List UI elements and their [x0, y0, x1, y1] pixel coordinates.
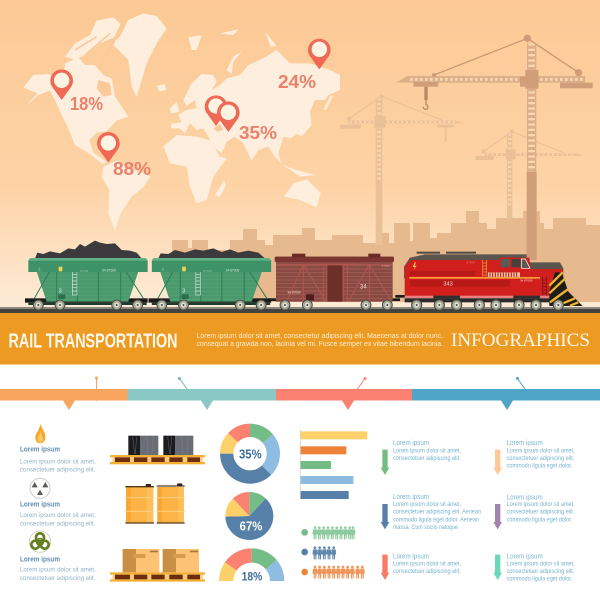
icon: radiation [30, 478, 50, 498]
note 4: commodo ligula eget dolor. [507, 463, 572, 470]
locomotive [395, 252, 583, 311]
label 24%: 24% [278, 71, 316, 92]
box wagon: 34 87009 [287, 291, 301, 295]
arrow: green [381, 450, 389, 475]
text: biohazard: Lorem ipsum [20, 554, 60, 563]
icon: flame [35, 424, 45, 443]
world map [23, 13, 340, 231]
hopper wagon 1 [25, 258, 148, 310]
label 35%: 35% [239, 122, 277, 143]
people row: orange [301, 566, 365, 579]
note 6: Lorem ipsum [507, 551, 543, 560]
note 2: massa. Cum sociis natoque [393, 524, 458, 531]
note 3 [393, 551, 461, 575]
skyline [172, 211, 600, 302]
coal load 1 [35, 241, 142, 258]
map pin: Central Asia [217, 101, 240, 132]
note 2 [393, 492, 481, 531]
note 5: Lorem ipsum dolor sit amet, [507, 501, 575, 508]
text: flammable: Lorem ipsum dolor sit amet, [20, 458, 96, 465]
note 3: Lorem ipsum dolor sit amet, [393, 560, 461, 567]
note 6: commodo ligula eget dolor. [507, 576, 572, 583]
locomotive: 34 87009 [520, 279, 533, 283]
orange title band [0, 313, 600, 364]
text: radioactive [20, 500, 96, 527]
chart: half donut 18%: 18% [242, 570, 262, 584]
crane large [396, 35, 593, 260]
note 2: commodo ligula eget dolor. Aenean [393, 516, 479, 523]
arrow: red [381, 555, 389, 580]
note 6: Lorem ipsum dolor sit amet, [507, 560, 575, 567]
map pin: Siberia [308, 39, 331, 69]
note 2: Lorem ipsum [393, 492, 429, 501]
note 5 [507, 492, 575, 523]
locomotive: 343 [443, 281, 453, 287]
marker pin salmon [358, 377, 366, 389]
map pin: Eastern Europe [205, 95, 227, 126]
arrow: purple [493, 504, 502, 529]
note 4: Lorem ipsum [507, 438, 543, 447]
note 2: consectetuer adipiscing elit. Aenean [393, 509, 481, 516]
bar chart [300, 430, 367, 499]
chart: donut 35% [227, 430, 273, 477]
box wagon: 34 [360, 284, 367, 290]
arrow: mint [493, 555, 502, 580]
note 3: consectetuer adipiscing elit. [393, 568, 461, 575]
band description: Lorem ipsum dolor sit amet, consectetur adipiscing elit. Maecenas at dolor nunc. [196, 331, 443, 340]
box wagon: 87009 [382, 264, 390, 268]
hazard column [20, 424, 96, 582]
band description [196, 331, 443, 348]
text: flammable: consectetuer adipiscing elit. [20, 467, 95, 474]
icon: biohazard [29, 531, 51, 552]
background sky [0, 0, 600, 313]
text: biohazard: Lorem ipsum dolor sit amet, [20, 567, 96, 574]
people row: blue [301, 546, 336, 559]
chart: donut 35%: 35% [239, 447, 262, 462]
marker pin blue [516, 377, 525, 389]
arrow: blue [381, 504, 389, 529]
people chart [301, 526, 365, 579]
note 1: consectetuer adipiscing elit. [393, 455, 461, 462]
box wagon [268, 254, 400, 310]
note 1: Lorem ipsum [393, 438, 429, 447]
note 4: Lorem ipsum dolor sit amet, [507, 447, 575, 454]
chart: pie 67%: 67% [240, 520, 262, 534]
map pin: Central America [97, 132, 120, 163]
marker pin orange [95, 376, 98, 401]
text: flammable: Lorem ipsum [20, 445, 60, 454]
note 1 [393, 438, 461, 462]
label 88%: 88% [113, 158, 151, 179]
note 3: Lorem ipsum [393, 551, 429, 560]
label 18%: 18% [70, 93, 103, 114]
band description: consequat a gravida non, lacinia vel mi. Fusce semper ex vitae bibendum lacinia. [196, 339, 443, 348]
chart: half donut 18% [226, 555, 277, 584]
rail track [0, 307, 600, 313]
note 1: Lorem ipsum dolor sit amet, [393, 447, 461, 454]
text: radioactive: consectetuer adipiscing elit. [20, 520, 95, 527]
crane right small [476, 130, 583, 219]
cargo: drums on pallet [110, 436, 205, 464]
text: radioactive: Lorem ipsum dolor sit amet, [20, 512, 96, 519]
note 6 [507, 551, 575, 583]
locomotive: 87009 [467, 260, 475, 264]
hopper wagon 2 [148, 258, 271, 310]
text: flammable [20, 445, 96, 474]
text: radioactive: Lorem ipsum [20, 500, 60, 509]
marker pin teal [178, 377, 187, 389]
cargo: oil barrels [125, 483, 185, 523]
arrow: peach [493, 450, 502, 475]
people row: green [301, 526, 355, 539]
text: biohazard: consectetuer adipiscing elit. [20, 575, 95, 582]
note 4 [507, 438, 575, 470]
cargo column [110, 436, 205, 582]
note 4: consectetuer adipiscing elit. [507, 455, 574, 462]
cargo: boxes on pallet [110, 549, 205, 582]
note 2: Lorem ipsum dolor sit amet, [393, 501, 461, 508]
arrows and notes [381, 438, 575, 583]
crane left [340, 94, 464, 245]
segmented colour bar [0, 389, 600, 410]
map pin: Alaska [50, 69, 73, 100]
coal load 2 [158, 248, 265, 258]
note 5: commodo ligula eget dolor. [507, 516, 572, 523]
heading: infographics: INFOGRAPHICS [451, 330, 590, 351]
text: biohazard [20, 554, 96, 582]
note 5: Lorem ipsum [507, 492, 543, 501]
note 6: consectetuer adipiscing elit. [507, 568, 574, 575]
note 5: consectetuer adipiscing elit. [507, 509, 574, 516]
chart: pie 67% [225, 492, 273, 540]
heading: rail transportation: RAIL TRANSPORTATION [8, 330, 178, 352]
